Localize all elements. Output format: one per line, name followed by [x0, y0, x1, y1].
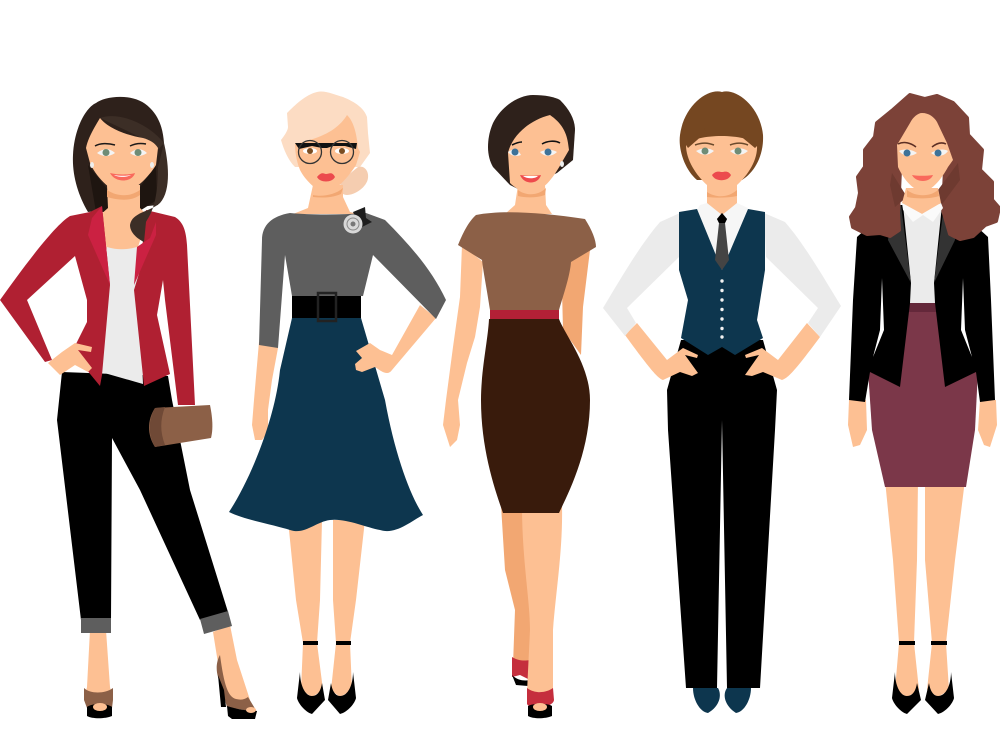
tie [715, 213, 729, 270]
red belt [490, 310, 559, 319]
eyes [508, 150, 557, 156]
shirt sleeves [603, 213, 841, 337]
hair shadow under jaw [88, 165, 157, 212]
hair silhouette [281, 92, 370, 167]
red blazer [0, 206, 110, 386]
navy skirt [229, 318, 423, 531]
bun [340, 167, 368, 195]
gray top [259, 213, 446, 348]
left pump [892, 672, 921, 714]
lips [712, 172, 731, 180]
eyes and brows [97, 149, 147, 156]
lips [317, 173, 335, 182]
shirt collar [902, 203, 943, 222]
ankle straps [899, 641, 947, 645]
trousers [57, 372, 228, 620]
forearms and hands [625, 323, 698, 380]
face [86, 118, 158, 193]
right pump [925, 672, 954, 714]
back leg [501, 505, 535, 665]
woman 3: short dark hair, brown dress with red belt [443, 95, 596, 718]
curly hair [851, 95, 999, 239]
back arm [562, 250, 590, 355]
woman 2: blonde hair, glasses, gray top and navy skirt [229, 92, 446, 714]
face [686, 136, 757, 193]
hair [680, 91, 763, 180]
right arm and hand [355, 305, 436, 373]
lapels [888, 205, 955, 283]
neck [505, 185, 552, 214]
belt with buckle [292, 296, 361, 318]
shirt collar [697, 203, 748, 270]
hair back [73, 97, 164, 212]
face [295, 115, 360, 193]
hand on hip [48, 343, 92, 375]
shoes [693, 688, 751, 713]
white top [101, 247, 143, 384]
vest buttons [720, 279, 724, 339]
face [508, 115, 569, 193]
neck [902, 188, 941, 214]
neck [707, 185, 737, 215]
woman 4: white shirt, navy vest, tie and black trousers [603, 91, 841, 713]
white shirt [902, 203, 943, 303]
hair highlight [100, 116, 164, 150]
mouth [110, 173, 135, 180]
left shoe [84, 688, 113, 708]
face [897, 113, 953, 192]
legs [885, 480, 965, 697]
brown dress top [458, 212, 596, 310]
plum skirt [868, 300, 978, 487]
right shoe [217, 655, 257, 712]
lapels [88, 206, 156, 285]
back shoe [512, 657, 530, 680]
front shoe [527, 688, 554, 707]
dark skirt [481, 319, 590, 513]
navy vest [679, 209, 765, 355]
earrings [90, 162, 94, 168]
hair [488, 95, 575, 190]
trouser cuffs [81, 611, 232, 634]
brooch [353, 207, 372, 228]
ankle straps [303, 641, 351, 645]
eyes [303, 148, 317, 154]
skirt waistband [909, 303, 936, 312]
neck and chest [100, 185, 148, 250]
glasses [295, 143, 357, 149]
eyes [899, 150, 948, 156]
sleeve slits [873, 278, 972, 357]
left arm and hand [252, 342, 278, 440]
mouth [520, 175, 541, 182]
clutch bag [149, 405, 212, 447]
earring [560, 161, 564, 167]
legs [84, 625, 250, 712]
woman 1: red blazer and black trousers [0, 97, 257, 719]
mouth [912, 175, 933, 181]
legs [288, 520, 365, 697]
front leg [522, 505, 562, 692]
hair curl [130, 143, 168, 242]
hair shadow [890, 163, 960, 207]
hands [848, 400, 997, 447]
woman 5: curly auburn hair, black blazer and plum skirt [848, 95, 999, 714]
pumps [297, 672, 325, 714]
bangs [686, 125, 758, 148]
black blazer [849, 205, 911, 402]
eyes [696, 148, 748, 155]
front arm and hand [443, 245, 483, 447]
trousers [667, 340, 777, 688]
neck [293, 185, 358, 214]
